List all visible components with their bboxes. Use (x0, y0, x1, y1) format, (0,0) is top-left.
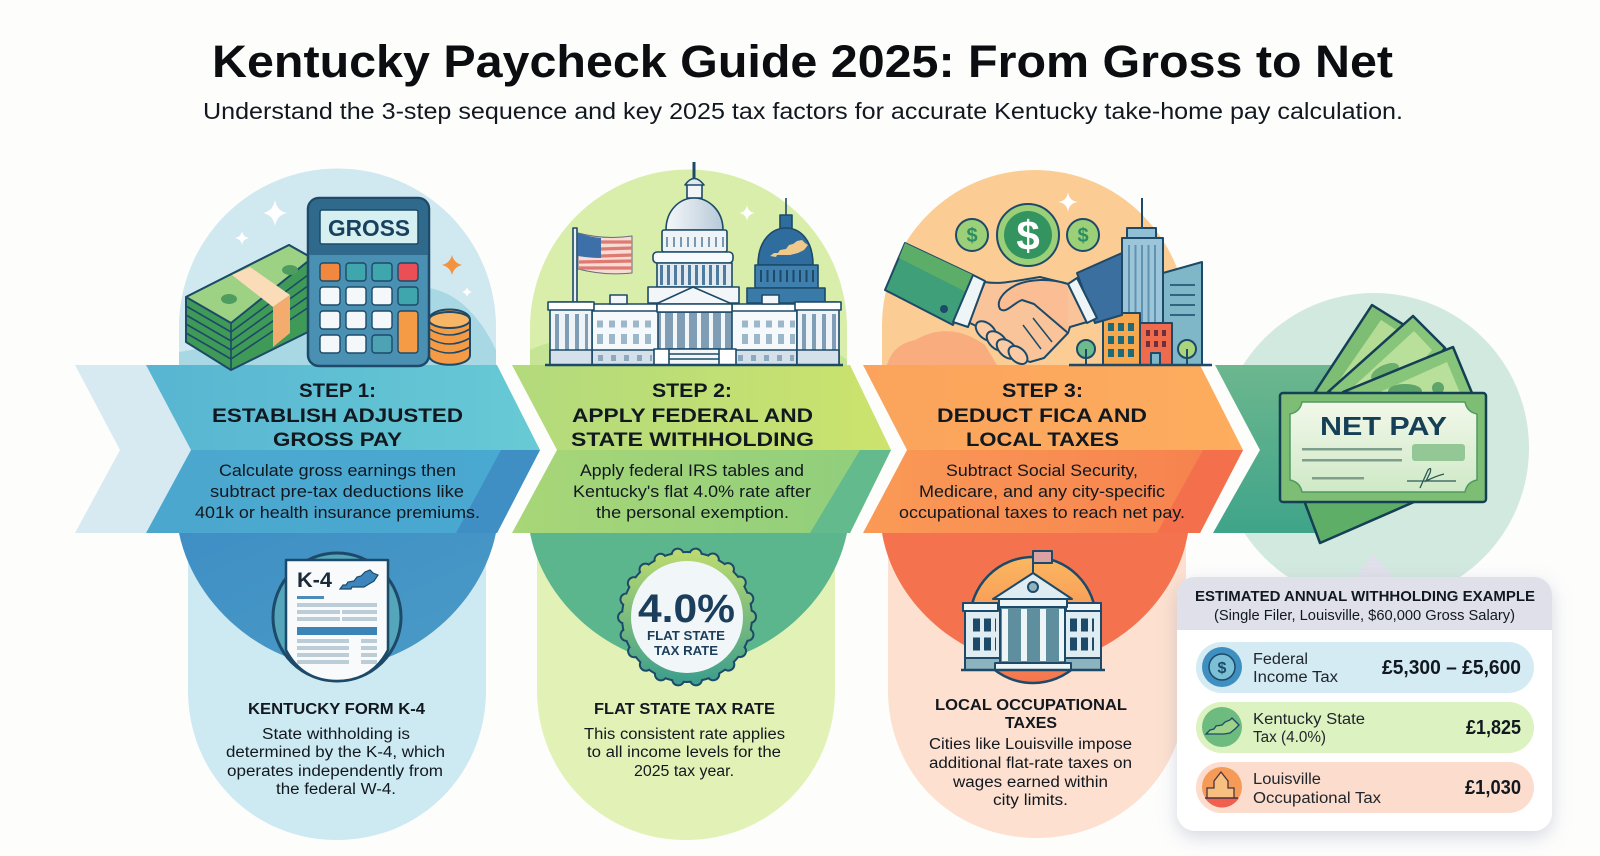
check label: NET PAY (1320, 411, 1447, 441)
step 3 description: Medicare, and any city-specific (919, 483, 1165, 501)
icon: Kentucky (1202, 707, 1242, 747)
step 1 heading: STEP 1: (299, 380, 376, 402)
step 1 description (195, 462, 480, 522)
step 2 heading (571, 380, 814, 451)
arch shading: step 3 (886, 331, 1000, 370)
check signature (1407, 469, 1456, 488)
upper arch: step 2 (530, 170, 847, 370)
chevron upper: step 2 (512, 365, 891, 450)
label: Federal (1253, 651, 1308, 668)
calculator screen text: GROSS (328, 215, 410, 241)
net pay backdrop circle (1219, 293, 1529, 603)
chevron lower: step 1 (146, 450, 540, 533)
step 1 description: Calculate gross earnings then (219, 462, 456, 480)
callout text: Kentucky Form K-4: operates independently from (227, 763, 443, 780)
icon: handshake (885, 243, 1122, 368)
arch shading: step 2 (530, 341, 847, 370)
icon: dollar coins: $ (1016, 212, 1040, 259)
panel: net pay (1213, 305, 1486, 543)
step 1 heading (212, 380, 463, 451)
thumb (999, 280, 1068, 333)
value: £5,300 – £5,600 (1382, 657, 1521, 679)
badge caption: TAX RATE (654, 643, 718, 658)
step 2 description (573, 462, 812, 522)
hands (968, 277, 1087, 362)
icon: city hall (961, 551, 1105, 683)
panel: step 1 column (75, 168, 540, 840)
lower half ellipse: step 3 (882, 533, 1188, 665)
step 3 description (899, 462, 1185, 522)
form lines (297, 596, 377, 664)
label (1253, 771, 1381, 807)
step 1 heading: GROSS PAY (273, 429, 402, 451)
callout text: local occupational taxes: wages earned within (952, 774, 1108, 791)
callout text: Kentucky Form K-4: determined by the K-4, which (226, 744, 445, 761)
row: Louisville occupational tax (1196, 762, 1534, 813)
chevron upper: step 3 (863, 365, 1243, 450)
step 2 description: Kentucky's flat 4.0% rate after (573, 483, 812, 501)
main dome (648, 162, 739, 303)
icon: dollar coins (956, 192, 1099, 266)
step 1 description: 401k or health insurance premiums. (195, 504, 480, 522)
net pay chevron (1213, 365, 1345, 533)
icon: capitol building (545, 162, 843, 365)
callout text: local occupational taxes (929, 736, 1132, 809)
step 2 heading: STATE WITHHOLDING (571, 429, 814, 451)
callout text: local occupational taxes: additional flat-rate taxes on (929, 755, 1132, 772)
icon: fanned banknotes (1302, 305, 1472, 543)
callout heading: local occupational taxes (935, 697, 1127, 732)
label: Tax (4.0%) (1253, 729, 1326, 746)
icon: sparkles (235, 200, 472, 297)
flag (573, 228, 632, 303)
icon: coins (429, 310, 470, 365)
callout heading: Kentucky Form K-4: KENTUCKY FORM K-4 (248, 701, 425, 718)
capitol wings (592, 295, 797, 365)
end pavilions (548, 302, 841, 365)
step 3 description: occupational taxes to reach net pay. (899, 504, 1185, 522)
lower capsule: step 3 (888, 533, 1186, 838)
step 3 heading (937, 380, 1147, 451)
arch shading: step 1 (179, 287, 496, 370)
callout text: flat state tax rate (584, 726, 785, 780)
callout text: Kentucky Form K-4 (226, 726, 445, 798)
step 1 heading: ESTABLISH ADJUSTED (212, 405, 463, 427)
value: £1,825 (1466, 717, 1521, 739)
upper arch: step 3 (882, 170, 1188, 370)
row: Kentucky state tax (1196, 702, 1534, 753)
right sleeve (1077, 253, 1122, 323)
light lead-in chevron (75, 365, 191, 533)
chevron upper: step 1 (146, 365, 540, 450)
fingers (972, 317, 1031, 368)
lower half ellipse: step 2 (530, 533, 847, 665)
central portico (654, 287, 736, 365)
label: Occupational Tax (1253, 790, 1381, 807)
label: Income Tax (1253, 669, 1338, 686)
icon: dollar (1202, 647, 1242, 687)
icon: 4.0% rate badge (621, 551, 753, 683)
panel: step 2 column (512, 162, 891, 840)
badge caption (647, 628, 725, 658)
label (1253, 651, 1338, 686)
callout heading: local occupational taxes: LOCAL OCCUPATIONAL (935, 697, 1127, 714)
panel: withholding example card (1177, 554, 1552, 831)
chevron lower: step 3 (863, 450, 1243, 533)
label: Louisville (1253, 771, 1321, 788)
blue state dome (747, 198, 825, 303)
icon: city (1202, 767, 1242, 807)
lower capsule: step 2 (537, 533, 835, 840)
step 3 heading: DEDUCT FICA AND (937, 405, 1147, 427)
check lines (1302, 444, 1465, 480)
card pointer (1354, 554, 1394, 578)
callout heading: local occupational taxes: TAXES (1005, 715, 1057, 732)
badge caption: FLAT STATE (647, 628, 725, 643)
icon: city buildings (1069, 198, 1212, 365)
label: Kentucky State (1253, 711, 1365, 728)
callout text: local occupational taxes: city limits. (993, 792, 1068, 809)
card subheading: (Single Filer, Louisville, $60,000 Gross Salary) (1214, 608, 1515, 624)
step 3 heading: LOCAL TAXES (966, 429, 1119, 451)
callout text: flat state tax rate: This consistent rate applies (584, 726, 785, 743)
icon: K-4 form (273, 553, 401, 681)
row: federal income tax (1196, 642, 1534, 693)
callout text: flat state tax rate: 2025 tax year. (634, 763, 734, 780)
callout heading: flat state tax rate: FLAT STATE TAX RATE (594, 701, 775, 718)
value: £1,030 (1465, 777, 1521, 799)
icon: dollar coins: $ (966, 225, 978, 247)
step 3 description: Subtract Social Security, (946, 462, 1138, 480)
step 2 description: Apply federal IRS tables and (580, 462, 804, 480)
callout text: Kentucky Form K-4: the federal W-4. (276, 781, 396, 798)
cuffs (953, 275, 985, 327)
icon: calculator (308, 198, 429, 366)
subtitle: Understand the 3-step sequence and key 2025 tax factors for accurate Kentucky take-home pay calculation. (203, 98, 1403, 124)
icon: dollar coins: $ (1077, 225, 1089, 247)
icon: Kentucky outline (340, 570, 378, 589)
step 2 heading: APPLY FEDERAL AND (572, 405, 813, 427)
callout text: Kentucky Form K-4: State withholding is (262, 726, 410, 743)
form label: K-4 (297, 569, 332, 592)
chevron dark corner: step 1 (456, 450, 540, 533)
card header band (1177, 577, 1552, 630)
left sleeve (885, 243, 973, 325)
lower half ellipse: step 1 (179, 533, 496, 667)
lower capsule: step 1 (188, 533, 486, 840)
step 3 heading: STEP 3: (1002, 380, 1083, 402)
panel: step 3 column (863, 170, 1243, 838)
ground line (545, 364, 843, 366)
title: Kentucky Paycheck Guide 2025: From Gross to Net (212, 36, 1393, 87)
step 2 description: the personal exemption. (596, 504, 789, 522)
step 2 heading: STEP 2: (652, 380, 732, 402)
icon: money stack (186, 245, 312, 370)
upper arch: step 1 (179, 168, 496, 370)
callout text: local occupational taxes: Cities like Louisville impose (929, 736, 1132, 753)
chevron lower: step 2 (512, 450, 891, 533)
sparkle (739, 205, 755, 221)
step 1 description: subtract pre-tax deductions like (210, 483, 464, 501)
callout text: flat state tax rate: to all income levels for the (587, 744, 781, 761)
chevron dark corner: step 3 (1157, 450, 1243, 533)
label (1253, 711, 1365, 746)
icon: dollar: $ (1218, 660, 1227, 677)
calculator keys (320, 263, 418, 353)
card heading: ESTIMATED ANNUAL WITHHOLDING EXAMPLE (1195, 588, 1535, 605)
chevron dark corner: step 2 (810, 450, 891, 533)
card body (1177, 577, 1552, 831)
badge value: 4.0% (638, 587, 735, 631)
icon: net pay check (1280, 393, 1486, 502)
